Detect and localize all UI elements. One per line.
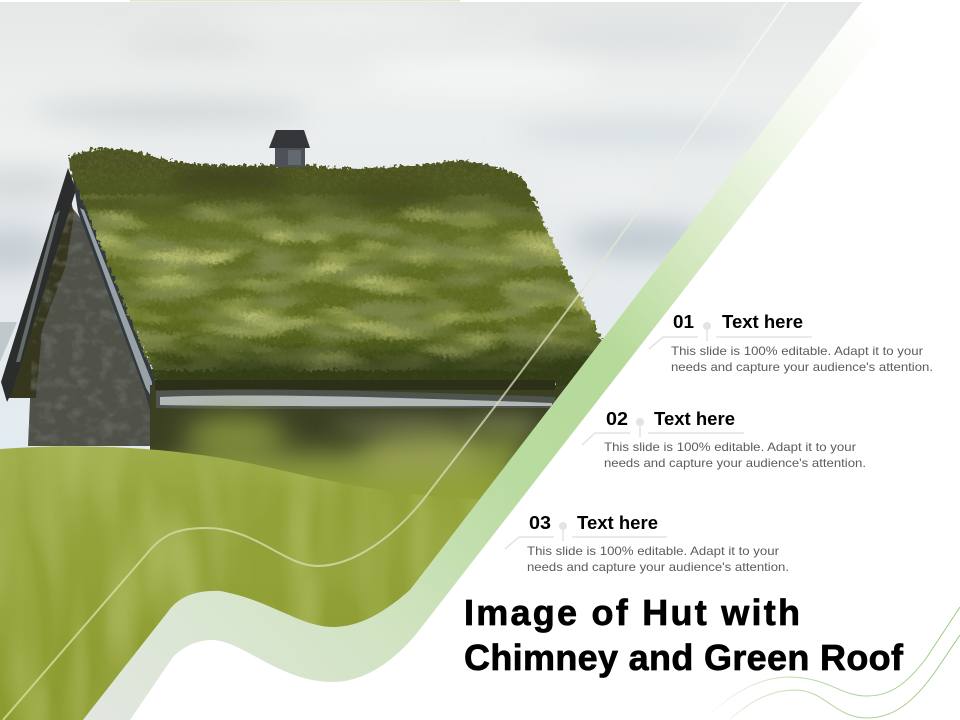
connector 03: [505, 522, 667, 549]
top green edge: [130, 0, 460, 2]
sky: [0, 0, 870, 460]
heading 02: Text here: [654, 409, 735, 429]
description 02: This slide is 100% editable. Adapt it to your: [604, 440, 856, 454]
item 03: needs and capture your audience's attention.: [527, 560, 789, 574]
item 02: [582, 409, 866, 470]
number 02: 02: [606, 409, 628, 429]
decorative curves bottom right: [712, 607, 960, 719]
item 03: [505, 513, 789, 574]
item 02: needs and capture your audience's attention.: [604, 456, 866, 470]
hut: [1, 130, 660, 490]
eave: [155, 380, 555, 409]
green turf roof: [68, 146, 604, 388]
lower wall: [150, 385, 568, 489]
heading 01: Text here: [722, 312, 803, 332]
number 01: 01: [673, 312, 694, 332]
gable wall: [9, 203, 150, 446]
title: Image of Hut with: [464, 592, 800, 633]
distant hill: [0, 322, 17, 362]
connector 02: [582, 418, 744, 445]
description 03: This slide is 100% editable. Adapt it to your: [527, 544, 779, 558]
right bargeboard: [72, 172, 158, 410]
heading 03: Text here: [577, 513, 658, 533]
number 03: 03: [529, 513, 551, 533]
blurred grass field: [0, 415, 540, 720]
connector 01: [649, 322, 812, 349]
description 01: This slide is 100% editable. Adapt it to your: [671, 344, 923, 358]
item 01: needs and capture your audience's attention.: [671, 360, 933, 374]
title: Chimney and Green Roof: [464, 637, 904, 678]
title: [464, 592, 904, 678]
left roof edge: [1, 168, 76, 402]
chimney: [269, 130, 310, 167]
item 01: [649, 312, 933, 374]
